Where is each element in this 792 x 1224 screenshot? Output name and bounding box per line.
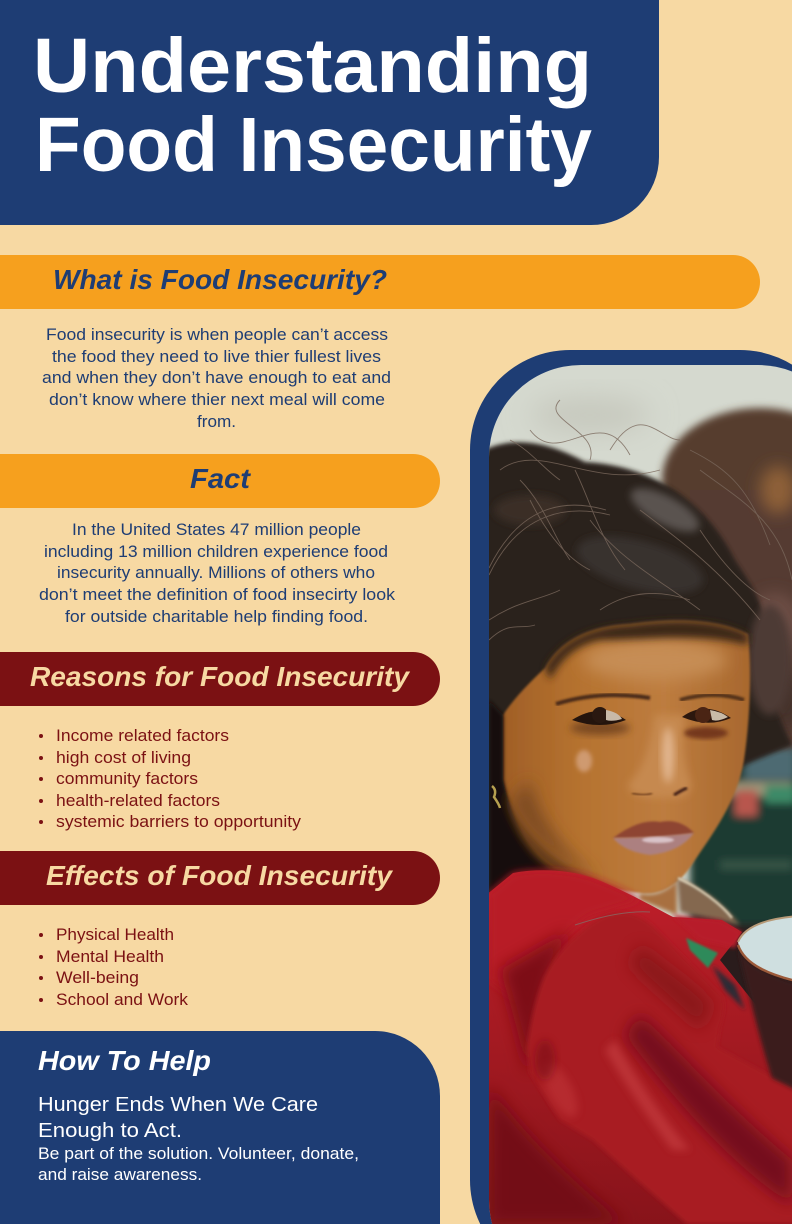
ear-side hair shadow: [489, 701, 546, 892]
left eye: [570, 707, 630, 735]
bowl: [738, 916, 792, 1092]
fact text: In the United States 47 million people: [72, 521, 361, 539]
collar and neck: [640, 878, 740, 925]
red shirt: [480, 870, 792, 1224]
jaw shadow: [504, 798, 588, 876]
title: Food Insecurity: [35, 102, 592, 188]
arm dark fold: [625, 1015, 792, 1205]
face: [503, 620, 750, 894]
effects list: [39, 926, 189, 1009]
slogan: Hunger Ends When We Care: [38, 1093, 318, 1116]
nose: [629, 715, 691, 798]
shirt shoulder: [489, 870, 640, 1000]
effects list: Well-being: [56, 969, 139, 987]
definition text: [42, 326, 391, 431]
right eye: [682, 707, 731, 739]
hair mass: [480, 442, 792, 900]
lips: [613, 821, 694, 855]
heading bar: what is food insecurity: What is Food Insecurity?: [53, 264, 387, 295]
fact text: for outside charitable help finding food.: [65, 608, 368, 626]
effects list: Mental Health: [56, 948, 164, 966]
definition text: don’t know where thier next meal will come: [49, 391, 385, 409]
definition text: Food insecurity is when people can’t access: [46, 326, 388, 344]
slogan: Enough to Act.: [38, 1119, 182, 1142]
crease between body and arm: [500, 930, 570, 1075]
panel: how to help: [0, 1031, 440, 1224]
fact text: [39, 521, 396, 626]
section: what is food insecurity: [0, 255, 760, 431]
background bokeh: [749, 466, 792, 728]
heading bar: effects: [0, 851, 440, 905]
forehead highlight: [583, 640, 727, 680]
definition text: the food they need to live thier fullest lives: [52, 348, 381, 366]
collar red: [672, 915, 742, 948]
shirt lower left: [489, 1090, 615, 1224]
title: Understanding: [33, 23, 592, 109]
shirt arm: [527, 913, 792, 1224]
earring: [492, 786, 500, 808]
reasons list: community factors: [56, 770, 198, 788]
hair sheen: [494, 480, 792, 715]
fact text: including 13 million children experience food: [44, 543, 388, 561]
effects list: Physical Health: [56, 926, 174, 944]
sleeve seam: [575, 912, 650, 925]
heading bar: reasons: [0, 652, 440, 706]
heading bar: fact: Fact: [190, 463, 252, 494]
photo: child holding a bowl: [480, 365, 792, 1224]
right eyebrow: [680, 695, 744, 700]
section: fact: [0, 454, 440, 626]
definition text: from.: [197, 413, 236, 431]
blurred wall tones: [542, 396, 638, 434]
cheek glint: [576, 750, 592, 772]
section: effects: [0, 851, 440, 1009]
heading bar: fact: [0, 454, 440, 508]
fact text: don’t meet the definition of food insecirty look: [39, 586, 396, 604]
reasons list: Income related factors: [56, 727, 229, 745]
blurred head behind: [662, 408, 792, 780]
title banner: [0, 0, 659, 225]
reasons list: high cost of living: [56, 749, 191, 767]
slogan: [38, 1093, 318, 1142]
call to action: [38, 1145, 359, 1184]
photo frame: [470, 350, 792, 1224]
call to action: and raise awareness.: [38, 1166, 202, 1184]
reasons list: health-related factors: [56, 792, 220, 810]
heading bar: effects: Effects of Food Insecurity: [46, 860, 393, 891]
effects list: School and Work: [56, 991, 189, 1009]
section: reasons: [0, 652, 440, 831]
arm upper shading: [630, 945, 712, 1030]
definition text: and when they don’t have enough to eat and: [42, 369, 391, 387]
background crowd: [684, 745, 792, 1003]
heading bar: what is food insecurity: [0, 255, 760, 309]
reasons list: systemic barriers to opportunity: [56, 813, 302, 831]
hair strands: [489, 400, 792, 640]
fringe shadow: [545, 620, 748, 680]
title: [33, 23, 592, 188]
call to action: Be part of the solution. Volunteer, donate,: [38, 1145, 359, 1163]
heading bar: reasons: Reasons for Food Insecurity: [30, 661, 410, 692]
reasons list: [39, 727, 302, 831]
heading: how to help: How To Help: [38, 1045, 211, 1076]
green tag: [686, 938, 718, 968]
arm highlight: [605, 1040, 690, 1150]
sleeve fold: [546, 1068, 576, 1115]
fact text: insecurity annually. Millions of others who: [57, 564, 375, 582]
left eyebrow: [556, 695, 650, 704]
